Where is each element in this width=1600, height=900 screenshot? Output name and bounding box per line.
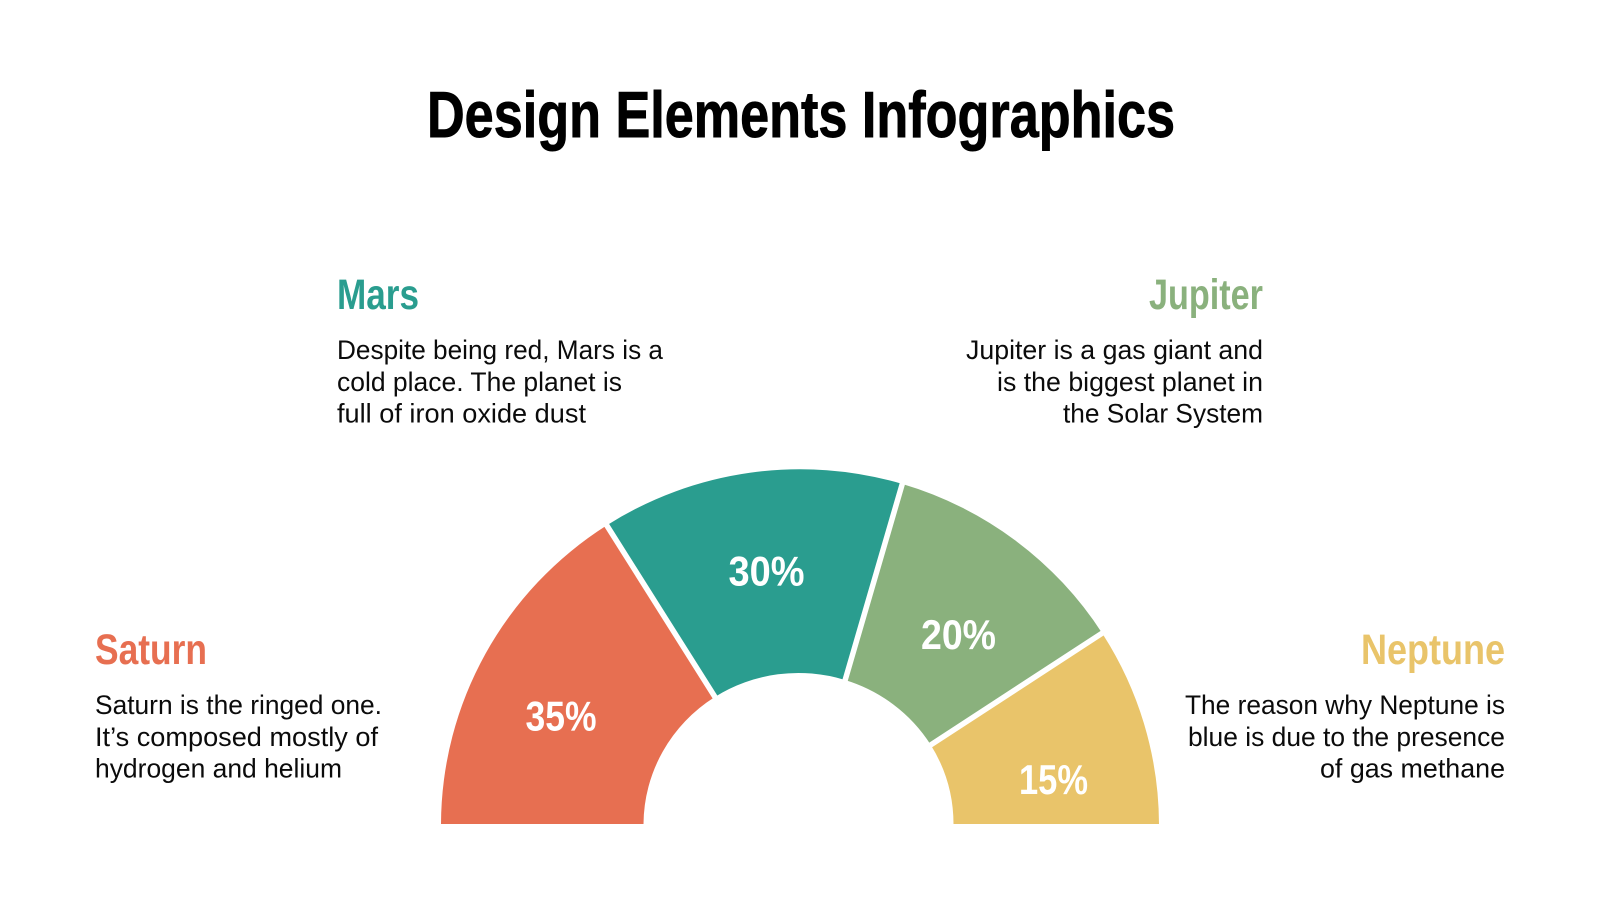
segment: Mars 30% xyxy=(606,469,902,697)
segment: Jupiter 20%: 20% xyxy=(921,611,996,658)
text block: Saturn description: It’s composed mostly of xyxy=(95,722,379,752)
chart: semicircular segmented gauge xyxy=(441,469,1159,824)
text block: Saturn description xyxy=(95,690,382,784)
text block: Mars description: full of iron oxide dust xyxy=(337,398,587,428)
segment: Mars 30%: 30% xyxy=(728,548,804,594)
text block: Jupiter description: the Solar System xyxy=(1063,398,1263,428)
text block: Mars description xyxy=(337,335,663,428)
text block: Neptune description xyxy=(1185,690,1505,784)
text block: Neptune description: of gas methane xyxy=(1320,754,1505,784)
text block: Saturn description: Saturn is the ringed one. xyxy=(95,690,382,720)
text block: Jupiter description: Jupiter is a gas giant and xyxy=(966,335,1263,365)
text block: Saturn description: hydrogen and helium xyxy=(95,754,342,784)
panel: Neptune xyxy=(1185,626,1505,784)
segment: Jupiter 20% xyxy=(845,484,1102,744)
title: Design Elements Infographics xyxy=(427,78,1175,151)
text block: Jupiter description xyxy=(966,335,1263,428)
heading: Neptune: Neptune xyxy=(1361,626,1505,674)
panel: Saturn xyxy=(95,626,382,784)
text block: Neptune description: The reason why Neptune is xyxy=(1185,690,1505,720)
panel: Jupiter xyxy=(966,271,1263,428)
text block: Jupiter description: is the biggest planet in xyxy=(997,367,1263,397)
segment: Neptune 15% xyxy=(930,633,1159,824)
text block: Mars description: cold place. The planet is xyxy=(337,367,622,397)
text block: Neptune description: blue is due to the presence xyxy=(1188,722,1505,752)
segment: Saturn 35% xyxy=(441,526,715,824)
text block: Mars description: Despite being red, Mars is a xyxy=(337,335,663,365)
segment: Saturn 35%: 35% xyxy=(526,692,596,740)
heading: Mars: Mars xyxy=(337,271,419,319)
panel: Mars xyxy=(337,271,663,428)
heading: Jupiter: Jupiter xyxy=(1149,271,1263,319)
segment: Neptune 15%: 15% xyxy=(1019,756,1088,803)
heading: Saturn: Saturn xyxy=(95,626,207,674)
